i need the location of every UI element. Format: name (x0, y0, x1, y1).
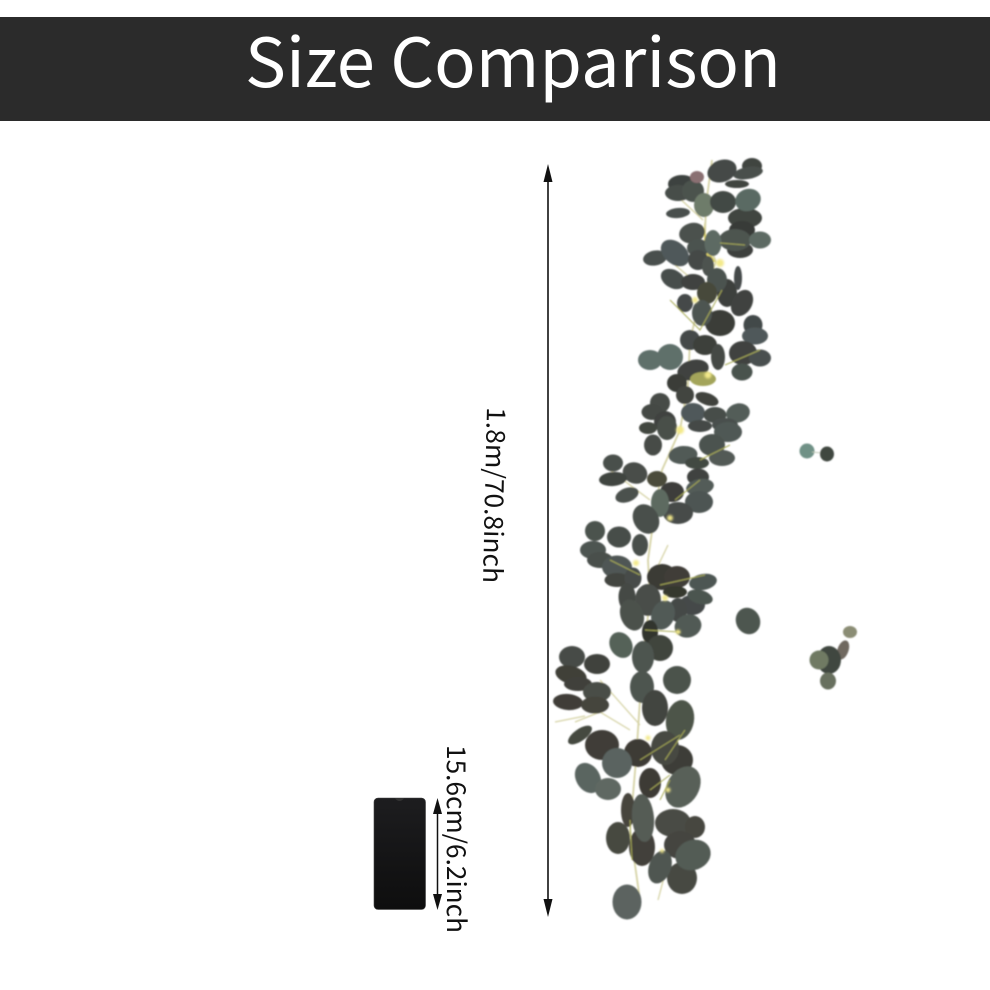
label: garland length: 1.8m/70.8inch (475, 407, 516, 584)
title banner (0, 8, 990, 121)
arrow: garland length (544, 164, 552, 917)
vein highlights (610, 243, 760, 860)
leaves: top section (638, 156, 771, 433)
fairy lights (633, 259, 724, 853)
lone leaf (731, 604, 765, 638)
leaves: lower section (552, 662, 715, 920)
garland stems (555, 160, 716, 900)
leaves: middle section (559, 416, 765, 674)
title: Size Comparison (245, 8, 781, 107)
arrow: phone length (433, 798, 442, 910)
icon: smartphone (374, 798, 426, 910)
label: phone length: 15.6cm/6.2inch (439, 745, 476, 933)
leaves: loose sprigs right (800, 444, 857, 690)
eucalyptus garland illustration (552, 156, 857, 920)
